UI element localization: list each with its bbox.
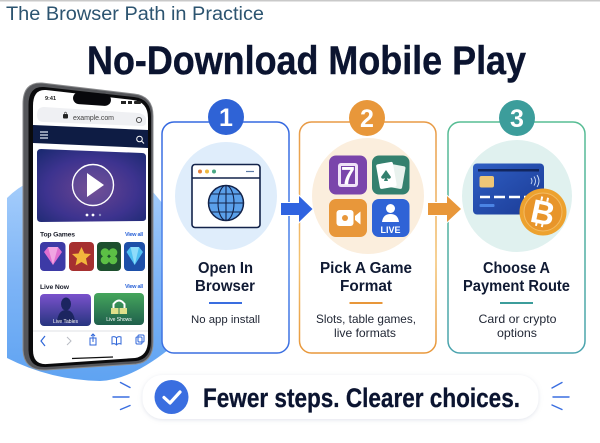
- live host tile: LIVE: [380, 225, 401, 235]
- step 1 divider: [209, 302, 242, 304]
- status time: 9:41: [45, 96, 56, 102]
- step 3 description: [478, 312, 557, 340]
- browser toolbar: [33, 331, 148, 346]
- step 2 title: [320, 260, 412, 295]
- navy nav bar: [33, 125, 148, 148]
- step 1 description: No app install: [191, 314, 260, 326]
- live video tile: [329, 199, 367, 237]
- bitcoin coin: B: [527, 192, 558, 233]
- slots tile: 7: [341, 162, 355, 190]
- left accent ticks: [113, 382, 130, 410]
- lock icon: [63, 112, 68, 118]
- table games tile: [372, 156, 410, 194]
- browser icon: [175, 142, 277, 250]
- address bar: [37, 107, 146, 126]
- arrow: step 2 to 3: [428, 196, 461, 222]
- top games label: Top Games: [40, 232, 75, 238]
- reload icon: [136, 117, 142, 123]
- dynamic island: [73, 92, 111, 106]
- step 2 title: Format: [340, 278, 392, 295]
- main title: No-Download Mobile Play: [87, 39, 527, 83]
- view all link: View all: [125, 232, 143, 238]
- step 2 title: Pick A Game: [320, 260, 412, 277]
- carousel dots: [86, 214, 101, 216]
- payment icon: [462, 140, 572, 252]
- step 2 divider: [350, 302, 382, 304]
- step 3 badge: 3: [510, 105, 524, 133]
- step 2 description: Slots, table games,: [316, 313, 416, 326]
- blue background blob: [7, 182, 168, 381]
- live shows tile: [94, 293, 144, 325]
- status icons: [121, 101, 141, 104]
- step 3 description: Card or crypto: [478, 312, 557, 326]
- step 3 title: Choose A: [483, 260, 550, 277]
- step 2 description: [316, 313, 416, 340]
- step 3 title: [463, 260, 570, 295]
- phone mockup: [23, 83, 153, 370]
- step 1 title: Open In: [198, 260, 253, 277]
- phone screen: [33, 90, 148, 364]
- step 3 badge: [499, 100, 535, 136]
- live tables tile: Live Tables: [53, 319, 78, 325]
- play button: [72, 164, 114, 206]
- hero banner: [37, 149, 146, 222]
- step 1 badge: 1: [219, 104, 233, 132]
- takeaway text: Fewer steps. Clearer choices.: [203, 383, 520, 413]
- step 3 divider: [500, 302, 533, 304]
- home indicator: [72, 357, 113, 358]
- game tile: star: [69, 242, 94, 271]
- step 1 card: [162, 99, 289, 353]
- arrow: step 1 to 2: [281, 196, 312, 222]
- right accent ticks: [552, 382, 569, 410]
- live tables tile: [40, 294, 91, 326]
- step 2 card: [300, 100, 436, 353]
- credit card: [473, 164, 544, 214]
- address text: example.com: [73, 115, 114, 122]
- search icon: [137, 136, 144, 144]
- step 3 description: options: [497, 326, 537, 340]
- step 3 title: Payment Route: [463, 278, 570, 295]
- step 1 badge: [208, 99, 244, 135]
- takeaway pill: [142, 375, 538, 419]
- page heading: The Browser Path in Practice: [6, 4, 264, 25]
- game tile: blue diamond: [124, 242, 145, 271]
- step 1 title: [195, 260, 255, 295]
- menu icon: [40, 132, 48, 138]
- live shows tile: Live Shows: [106, 317, 132, 323]
- step 2 description: live formats: [334, 327, 396, 340]
- step 2 badge: [349, 100, 385, 136]
- phone body: [23, 83, 153, 370]
- live now label: Live Now: [40, 284, 70, 291]
- check icon: [154, 380, 188, 414]
- game tile: diamond: [40, 242, 66, 271]
- game tile: clover: [97, 242, 121, 271]
- view all link: View all: [125, 284, 143, 290]
- step 1 title: Browser: [195, 278, 255, 295]
- step 3 card: [448, 100, 585, 353]
- game format icons: [312, 138, 424, 254]
- step 2 badge: 2: [360, 105, 374, 133]
